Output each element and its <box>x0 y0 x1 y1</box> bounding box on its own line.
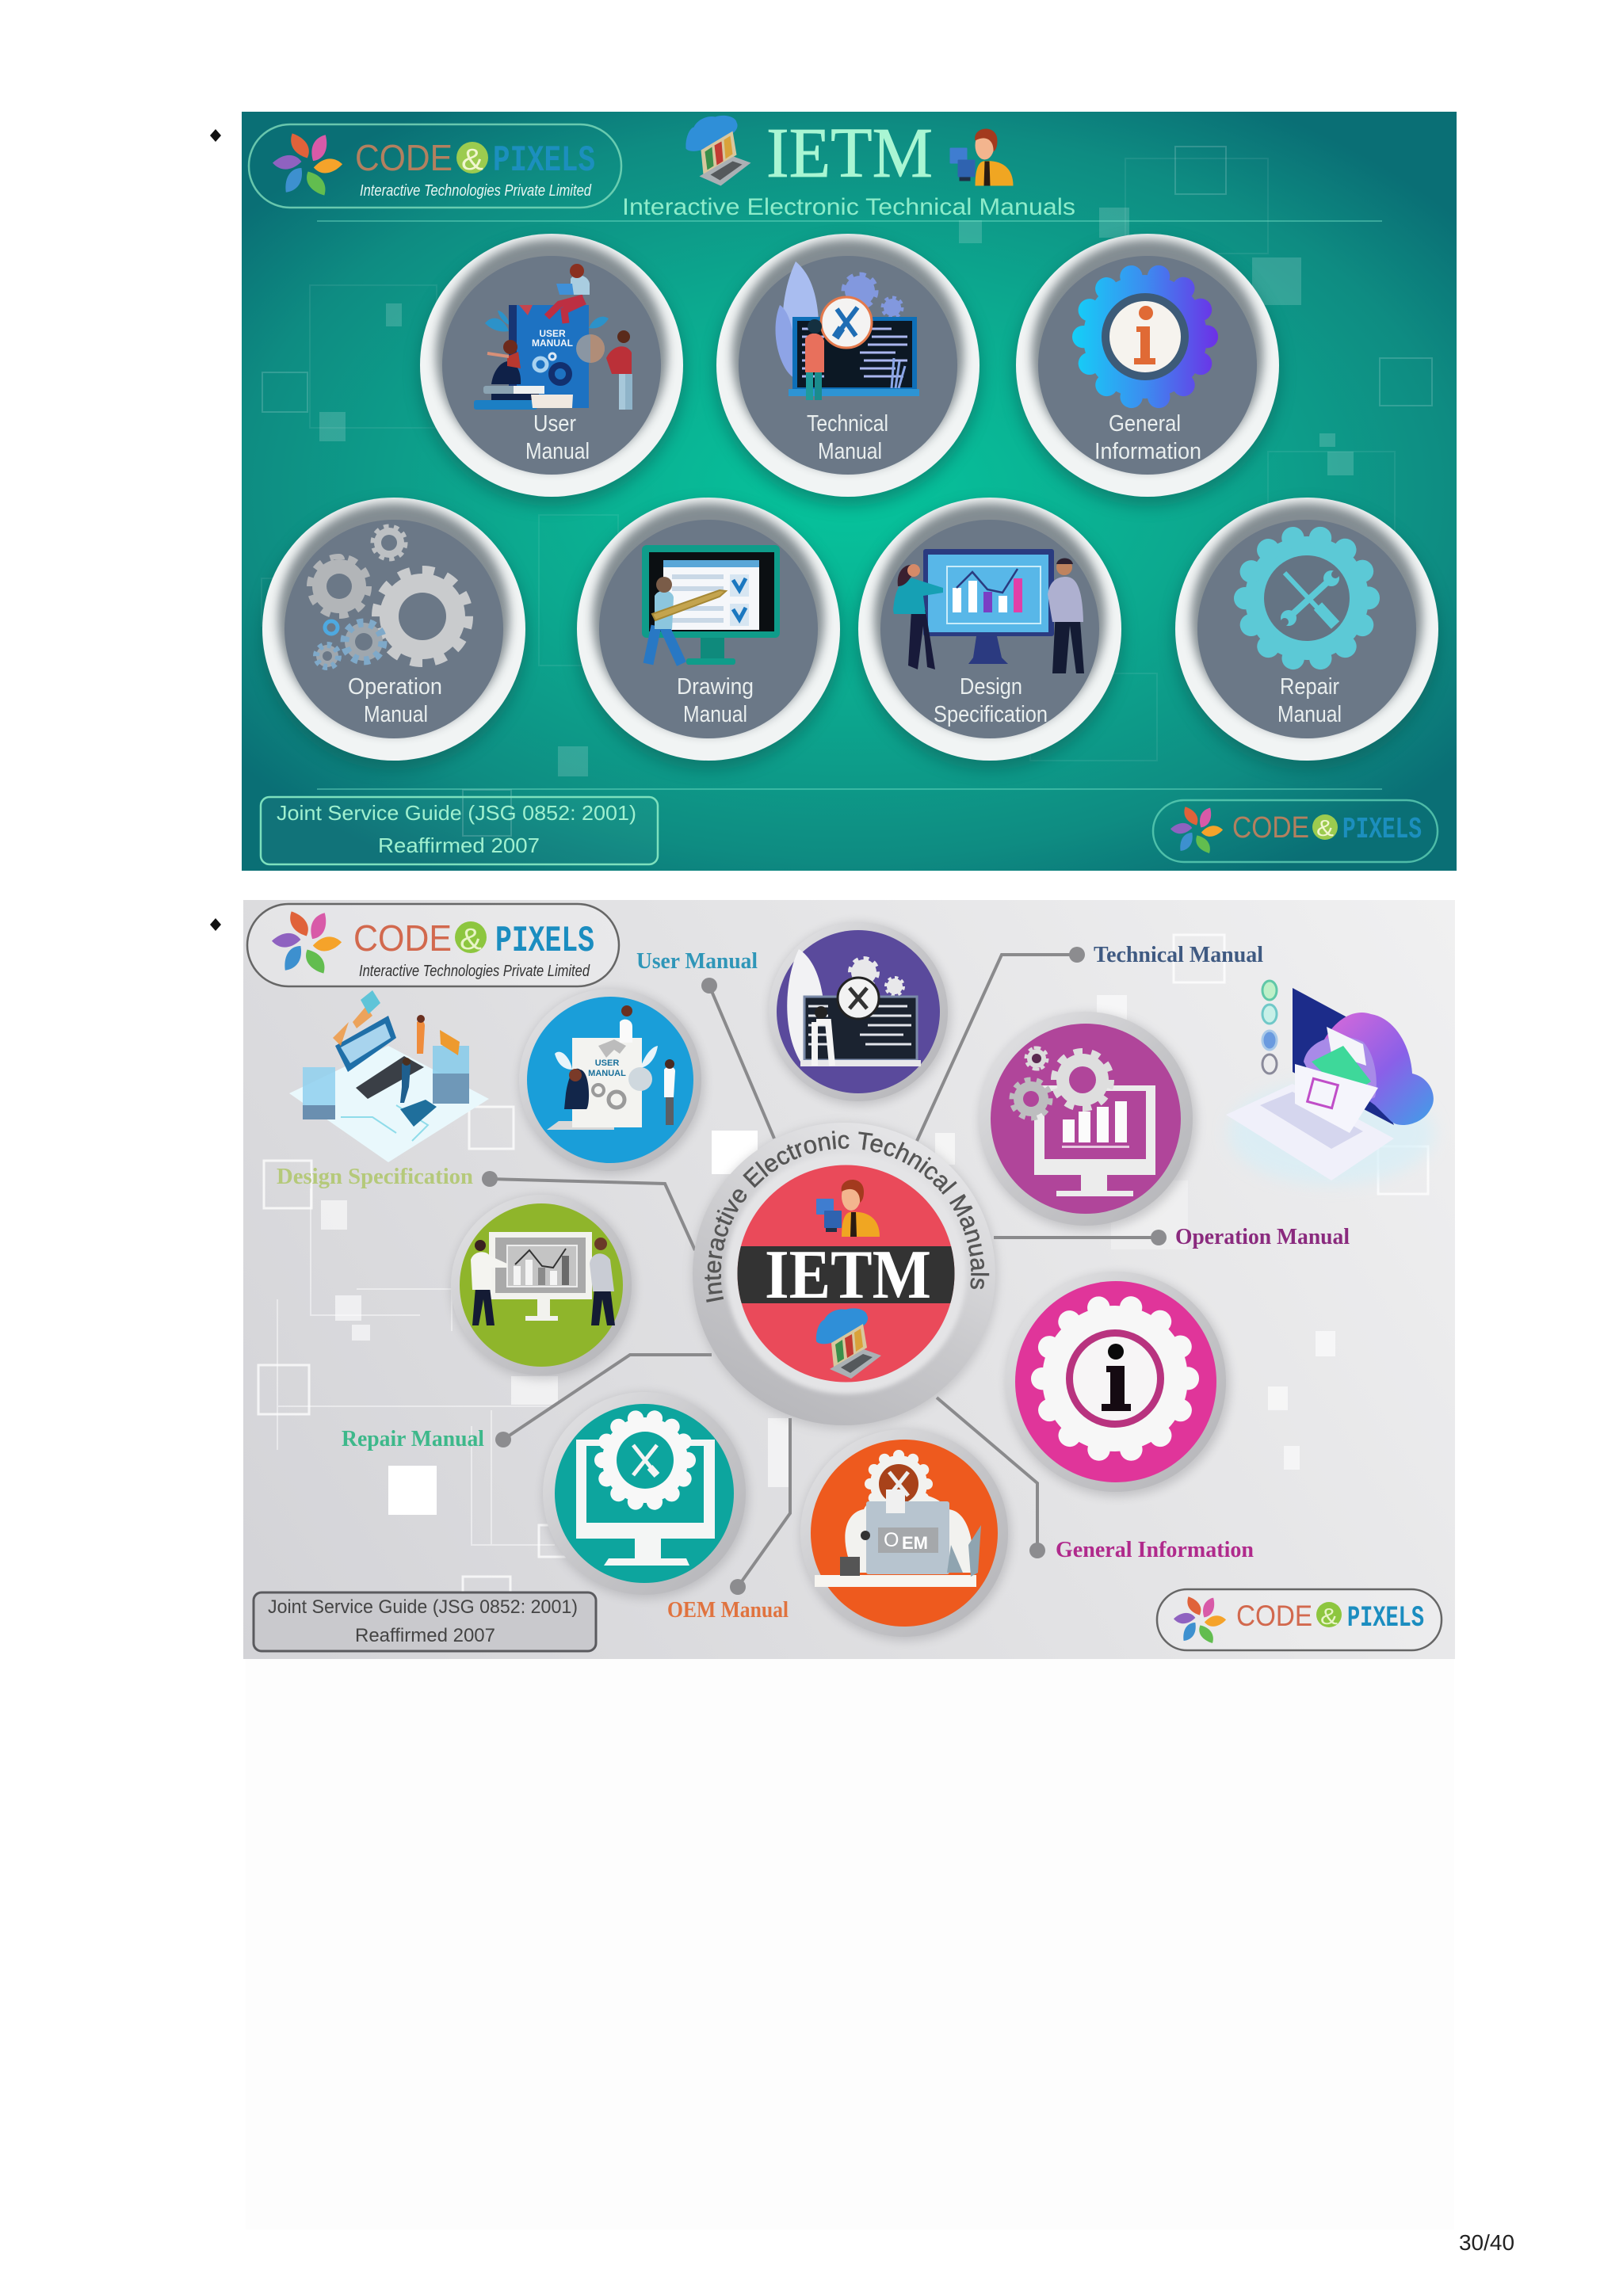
label: Operation Manual: Operation Manual <box>1175 1224 1350 1249</box>
panel: teal IETM manuals <box>242 112 1457 871</box>
label: Technical <box>807 411 888 437</box>
icon: cloud laptop <box>685 116 751 185</box>
callout: Joint Service Guide: Joint Service Guide (JSG 0852: 2001) <box>268 1596 578 1618</box>
logo bottom-right: CODE <box>1236 1600 1312 1632</box>
circle: Operation Manual: Manual <box>364 702 428 727</box>
background decor squares <box>262 147 1432 836</box>
callout: Joint Service Guide: Joint Service Guide (JSG 0852: 2001) <box>277 801 636 825</box>
label: Repair <box>1280 674 1339 700</box>
dot <box>701 978 717 994</box>
label: User Manual: User Manual <box>636 948 758 974</box>
label: User <box>533 411 576 437</box>
illustration: cloud laptop <box>1226 981 1434 1184</box>
label: Design Specification: Design Specification <box>277 1164 473 1189</box>
logo bottom-right: CODE <box>1232 811 1309 845</box>
hub: IETM centre <box>689 1120 1000 1432</box>
icon: presentation <box>471 1232 615 1325</box>
icon: pinwheel <box>272 130 342 200</box>
circle: Repair Manual: Manual <box>1277 702 1342 727</box>
icon: gears <box>312 528 465 667</box>
icon: laptop with tools <box>776 261 919 400</box>
circle: General Information: Information <box>1094 439 1201 464</box>
label: Design <box>960 674 1022 700</box>
logo bottom-right <box>1153 800 1438 862</box>
icon: man at computers <box>949 128 1013 185</box>
dot <box>482 1171 498 1187</box>
logo top-left: & <box>461 143 483 177</box>
callout: Joint Service Guide: Reaffirmed 2007 <box>378 833 540 857</box>
title: IETM: Interactive Electronic Technical Manuals <box>622 194 1075 220</box>
logo bottom-right: & <box>1320 1604 1338 1630</box>
books <box>483 386 523 394</box>
man <box>1052 610 1084 673</box>
circle: Technical Manual <box>769 922 951 1105</box>
icon: user manual white: MANUAL <box>588 1069 626 1078</box>
circle: Repair Manual <box>543 1392 749 1599</box>
hub: IETM centre: Interactive Electronic Technical Manuals <box>705 1131 989 1302</box>
person <box>806 368 813 400</box>
icon: pinwheel <box>1173 1594 1226 1646</box>
standing man <box>606 346 632 374</box>
callout: Joint Service Guide <box>254 1592 596 1651</box>
label: General <box>1109 411 1181 437</box>
top woman with laptop <box>547 298 585 323</box>
icon: gears monitor <box>1014 1049 1155 1196</box>
sitting woman <box>491 361 521 384</box>
circle: Design Specification <box>451 1195 635 1379</box>
callout: Joint Service Guide <box>261 797 658 864</box>
page number: 30/40 <box>1459 2230 1514 2255</box>
logo bottom-right: PIXELS <box>1342 813 1422 847</box>
circle: Design Specification <box>857 498 1123 770</box>
icon: info gear <box>1083 275 1207 399</box>
connector lines <box>490 955 1159 1587</box>
circle: Technical Manual: Manual <box>818 439 882 464</box>
circle: Drawing Manual <box>575 498 842 770</box>
icon: presentation chart <box>893 549 1084 673</box>
icon: user manual white: USER <box>595 1058 619 1068</box>
logo top-left: PIXELS <box>495 921 594 962</box>
heading: IETM <box>765 1237 931 1314</box>
circle: User Manual <box>519 989 705 1175</box>
title: IETM: IETM <box>766 114 933 193</box>
icon: OEM machine <box>815 1455 981 1587</box>
logo bottom-right: & <box>1316 816 1334 841</box>
icon: pinwheel <box>1170 804 1223 856</box>
dot <box>1069 947 1085 963</box>
icon: gear monitor <box>576 1417 715 1566</box>
label: Technical Manual: Technical Manual <box>1094 942 1263 967</box>
dot <box>730 1579 746 1595</box>
logo top-left: CODE <box>353 917 452 959</box>
logo top-left <box>247 904 619 986</box>
label: Operation <box>348 674 442 700</box>
icon: user manual book <box>474 264 632 410</box>
circle: Operation Manual <box>261 498 527 770</box>
label: General Information: General Information <box>1056 1537 1254 1562</box>
man with pencil <box>648 626 682 664</box>
logo top-left: CODE <box>355 137 453 178</box>
dot <box>1029 1543 1045 1558</box>
logo top-left: Interactive Technologies Private Limited <box>360 182 592 200</box>
logo bottom-right: PIXELS <box>1347 1602 1424 1635</box>
icon: laptop with tools <box>787 949 921 1066</box>
magnifier <box>576 334 605 363</box>
icon: monitor with checklist <box>642 545 780 665</box>
icon: OEM machine: EM <box>902 1533 928 1553</box>
label: Repair Manual: Repair Manual <box>342 1426 484 1451</box>
bullet 2 <box>210 918 221 931</box>
background decor <box>258 935 1428 1608</box>
circle: Technical Manual <box>715 234 981 506</box>
panel: light IETM hub diagram <box>243 900 1455 1659</box>
icon: user manual book: MANUAL <box>532 338 573 349</box>
circle: OEM Manual <box>800 1429 1011 1641</box>
logo bottom-right <box>1157 1589 1442 1650</box>
ring text <box>721 1148 972 1301</box>
icon: user manual book: USER <box>539 328 566 339</box>
icon: pinwheel <box>271 908 342 978</box>
circle: Operation Manual <box>979 1012 1197 1230</box>
circle: Drawing Manual: Manual <box>683 702 747 727</box>
dot <box>1151 1230 1167 1245</box>
logo top-left: PIXELS <box>493 140 595 181</box>
icon: user manual white <box>547 1005 675 1130</box>
label: Drawing <box>677 674 754 700</box>
bullet 1 <box>210 129 221 142</box>
icon: OEM machine: O <box>884 1529 899 1551</box>
woman <box>908 610 935 669</box>
icon: cloud laptop <box>816 1308 881 1379</box>
icon: info gear <box>1042 1306 1188 1451</box>
illustration: isometric data centre <box>289 990 489 1162</box>
title: IETM <box>622 114 1075 220</box>
circle: General Information <box>1006 1272 1230 1497</box>
logo top-left: & <box>460 923 482 956</box>
circle: General Information <box>1014 234 1281 506</box>
icon: repair gear <box>1245 536 1369 660</box>
circle: User Manual: Manual <box>525 439 590 464</box>
callout: Joint Service Guide: Reaffirmed 2007 <box>355 1625 495 1646</box>
faint band below image <box>246 1659 1454 2229</box>
logo top-left: Interactive Technologies Private Limited <box>359 963 590 980</box>
icon: man at computers <box>816 1180 880 1237</box>
label: OEM Manual: OEM Manual <box>667 1597 789 1623</box>
dot <box>495 1432 511 1447</box>
circle: Repair Manual <box>1174 498 1440 770</box>
circle: Design Specification: Specification <box>934 702 1048 727</box>
circle: User Manual <box>418 234 685 506</box>
logo top-left <box>249 124 621 208</box>
